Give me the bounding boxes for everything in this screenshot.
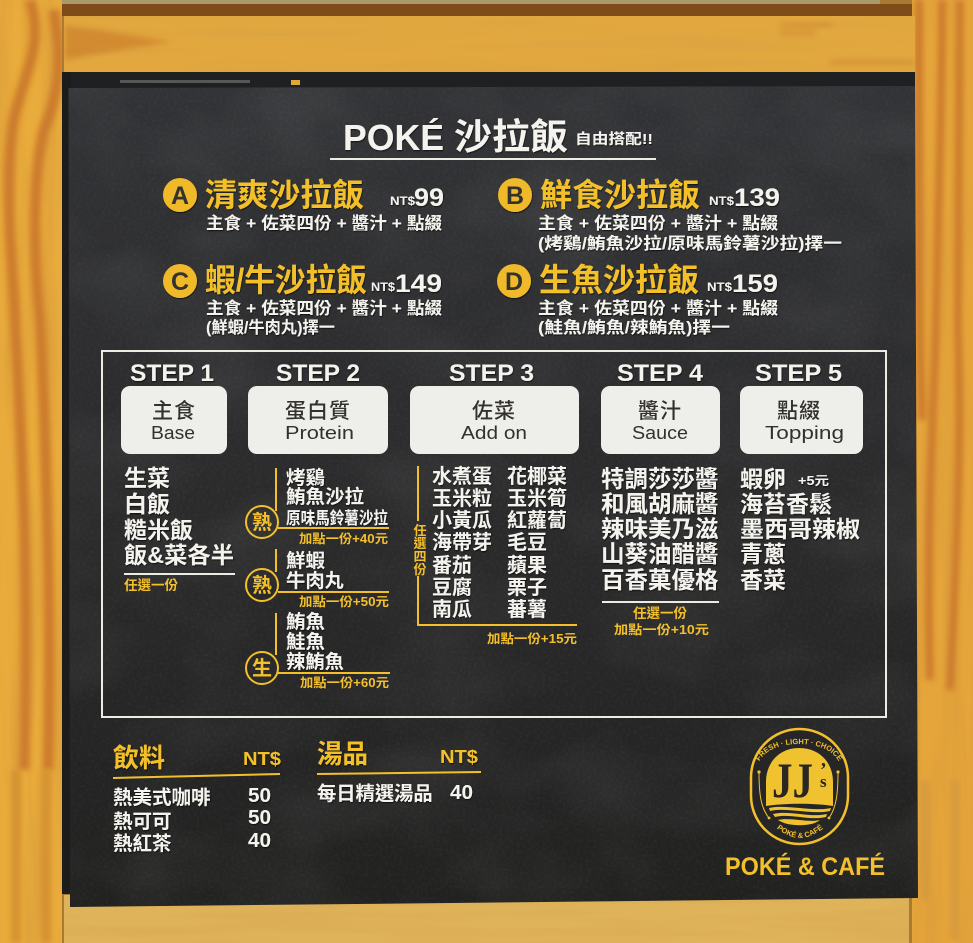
choose four vertical label bbox=[413, 523, 427, 577]
soup menu: 40 bbox=[450, 782, 473, 804]
step 4: sauce: 百香菓優格 bbox=[601, 567, 719, 593]
step 3: add on: 栗子 bbox=[507, 577, 547, 599]
step 2: protein: STEP 2 bbox=[276, 360, 360, 387]
title: 沙拉飯 bbox=[454, 116, 568, 157]
choose four vertical label: 四 bbox=[413, 549, 427, 564]
drinks menu: 50 bbox=[248, 785, 271, 807]
chalkboard panel bbox=[64, 84, 922, 912]
step 1: base: 白飯 bbox=[124, 491, 170, 517]
step 3: add on: 水煮蛋 bbox=[432, 465, 492, 488]
brand name: POKÉ & CAFÉ bbox=[725, 852, 885, 881]
JJ's logo badge bbox=[750, 728, 850, 846]
title: 自由搭配!! bbox=[575, 130, 653, 148]
option C bbox=[163, 262, 442, 337]
drinks menu: 飲料 bbox=[113, 743, 165, 773]
title bbox=[343, 116, 653, 158]
cooked group one: 加點一份+40元 bbox=[299, 531, 389, 546]
JJ's logo badge: ’ bbox=[820, 759, 827, 781]
step 3: add on: 加點一份+15元 bbox=[487, 631, 578, 646]
option D: (鮭魚/鮪魚/辣鮪魚)擇一 bbox=[538, 317, 730, 337]
option D: D bbox=[505, 268, 523, 296]
step 3: add on: 玉米筍 bbox=[507, 487, 567, 510]
step 4: sauce bbox=[601, 360, 720, 637]
JJ's logo badge: JJ bbox=[772, 752, 813, 808]
JJ's logo badge: FRESH · LIGHT · CHOICE bbox=[756, 738, 842, 761]
step 3: add on: 毛豆 bbox=[507, 531, 547, 554]
cooked group two: 牛肉丸 bbox=[286, 570, 344, 592]
step 5: topping: 點綴 bbox=[777, 400, 821, 423]
cooked group two: 加點一份+50元 bbox=[299, 594, 390, 609]
step 4: sauce: 辣味美乃滋 bbox=[601, 516, 718, 542]
option D: 主食 + 佐菜四份 + 醬汁 + 點綴 bbox=[538, 298, 778, 318]
raw group: 辣鮪魚 bbox=[286, 650, 344, 673]
step 3: add on: 豆腐 bbox=[432, 576, 472, 599]
option B: (烤鷄/鮪魚沙拉/原味馬鈴薯沙拉)擇一 bbox=[538, 233, 842, 253]
option C: 149 bbox=[395, 270, 442, 298]
option A bbox=[163, 177, 444, 233]
step 5: topping bbox=[740, 360, 863, 593]
step 3: add on: 紅蘿蔔 bbox=[507, 509, 567, 532]
step 1: base: 生菜 bbox=[124, 465, 170, 491]
step 5: topping: 蝦卵 bbox=[740, 466, 786, 492]
option A: 99 bbox=[414, 184, 444, 212]
cooked group one: 烤鷄 bbox=[286, 467, 325, 489]
step 1: base bbox=[121, 360, 235, 593]
cooked group two: 熟 bbox=[252, 573, 272, 597]
choose four vertical label: 選 bbox=[413, 536, 427, 551]
step 3: add on: 番茄 bbox=[432, 554, 472, 577]
step 1: base: 糙米飯 bbox=[124, 517, 193, 543]
soup menu: NT$ bbox=[440, 747, 478, 767]
option C: 蝦/牛沙拉飯 bbox=[205, 262, 367, 298]
step 1: base: 主食 bbox=[152, 400, 196, 423]
raw group: 鮭魚 bbox=[286, 630, 325, 653]
soup menu bbox=[317, 739, 481, 805]
option C: (鮮蝦/牛肉丸)擇一 bbox=[206, 318, 335, 337]
JJ's logo badge: s bbox=[820, 772, 827, 791]
drinks menu: NT$ bbox=[243, 749, 281, 769]
step 5: topping: 海苔香鬆 bbox=[740, 491, 832, 517]
option A: 主食 + 佐菜四份 + 醬汁 + 點綴 bbox=[206, 213, 442, 233]
option C: C bbox=[171, 268, 189, 296]
step 4: sauce: 加點一份+10元 bbox=[614, 622, 710, 637]
cooked group two bbox=[246, 549, 390, 609]
step 1: base: 任選一份 bbox=[124, 578, 178, 593]
step 3: add on: 小黃瓜 bbox=[432, 509, 492, 532]
steps frame bbox=[102, 351, 886, 717]
step 1: base: STEP 1 bbox=[130, 360, 214, 387]
step 5: topping: 香菜 bbox=[740, 567, 786, 593]
step 5: topping: 墨西哥辣椒 bbox=[740, 516, 860, 542]
option B: B bbox=[506, 182, 524, 210]
step 4: sauce: STEP 4 bbox=[617, 360, 704, 387]
step 3: add on: STEP 3 bbox=[449, 360, 534, 387]
dark gap behind board bbox=[62, 72, 915, 92]
step 5: topping: Topping bbox=[765, 423, 844, 443]
right post bbox=[912, 0, 973, 943]
step 3: add on: Add on bbox=[461, 423, 527, 443]
step 4: sauce: 特調莎莎醬 bbox=[601, 466, 718, 492]
step 3: add on: 玉米粒 bbox=[432, 487, 492, 510]
choose four vertical label: 份 bbox=[413, 562, 427, 577]
option A: NT$ bbox=[390, 196, 416, 208]
soup menu: 湯品 bbox=[317, 739, 368, 769]
step 5: topping: STEP 5 bbox=[755, 360, 842, 387]
option B: 鮮食沙拉飯 bbox=[540, 177, 700, 213]
title: POKÉ bbox=[343, 117, 444, 158]
drinks menu: 熱可可 bbox=[113, 811, 172, 833]
drinks menu: 50 bbox=[248, 807, 271, 829]
step 4: sauce: Sauce bbox=[632, 423, 688, 443]
raw group: 加點一份+60元 bbox=[300, 675, 390, 690]
step 3: add on bbox=[410, 360, 579, 646]
step 4: sauce: 山葵油醋醬 bbox=[601, 541, 718, 567]
step 2: protein bbox=[246, 360, 390, 690]
option A: 清爽沙拉飯 bbox=[205, 177, 364, 213]
drinks menu: 熱美式咖啡 bbox=[113, 787, 211, 809]
step 3: add on: 花椰菜 bbox=[507, 465, 567, 488]
step 3: add on: 海帶芽 bbox=[432, 531, 492, 554]
bottom rail bbox=[64, 895, 909, 943]
step 4: sauce: 和風胡麻醬 bbox=[601, 490, 718, 517]
option B bbox=[498, 177, 842, 253]
option D: NT$ bbox=[707, 282, 733, 294]
step 5: topping: 青蔥 bbox=[740, 541, 786, 567]
step 1: base: 飯&菜各半 bbox=[124, 542, 234, 568]
raw group: 鮪魚 bbox=[286, 610, 325, 633]
option D: 生魚沙拉飯 bbox=[539, 262, 699, 298]
option A: A bbox=[171, 182, 189, 210]
raw group bbox=[246, 610, 390, 690]
option C: NT$ bbox=[371, 282, 396, 294]
step 2: protein: Protein bbox=[285, 423, 354, 443]
step 3: add on: 南瓜 bbox=[432, 598, 472, 621]
cooked group two: 鮮蝦 bbox=[286, 550, 325, 572]
cooked group one: 鮪魚沙拉 bbox=[286, 485, 364, 508]
option B: 139 bbox=[734, 184, 780, 212]
cooked group one: 原味馬鈴薯沙拉 bbox=[286, 508, 388, 528]
step 3: add on: 蘋果 bbox=[507, 554, 547, 577]
step 4: sauce: 醬汁 bbox=[638, 400, 682, 423]
option D: 159 bbox=[732, 270, 778, 298]
choose four vertical label: 任 bbox=[413, 523, 427, 538]
title underline bbox=[330, 158, 656, 160]
option B: 主食 + 佐菜四份 + 醬汁 + 點綴 bbox=[538, 213, 778, 233]
drinks menu: 熱紅茶 bbox=[113, 833, 172, 855]
step 3: add on: 蕃薯 bbox=[507, 598, 547, 621]
option C: 主食 + 佐菜四份 + 醬汁 + 點綴 bbox=[206, 298, 442, 318]
drinks menu: 40 bbox=[248, 830, 271, 852]
drinks menu bbox=[113, 743, 281, 855]
cooked group one: 熟 bbox=[252, 510, 272, 534]
step 1: base: Base bbox=[151, 423, 195, 443]
raw group: 生 bbox=[252, 657, 272, 680]
step 4: sauce: 任選一份 bbox=[633, 606, 687, 621]
cooked group one bbox=[246, 467, 389, 546]
step 3: add on: 佐菜 bbox=[472, 400, 516, 423]
soup menu: 每日精選湯品 bbox=[317, 782, 433, 805]
step 2: protein: 蛋白質 bbox=[285, 400, 351, 423]
top rail bbox=[64, 16, 915, 72]
step 5: topping: +5元 bbox=[798, 474, 830, 488]
option B: NT$ bbox=[709, 196, 735, 208]
JJ's logo badge: POKÉ & CAFÉ bbox=[777, 824, 823, 838]
option D bbox=[497, 262, 778, 337]
left post bbox=[0, 0, 62, 943]
